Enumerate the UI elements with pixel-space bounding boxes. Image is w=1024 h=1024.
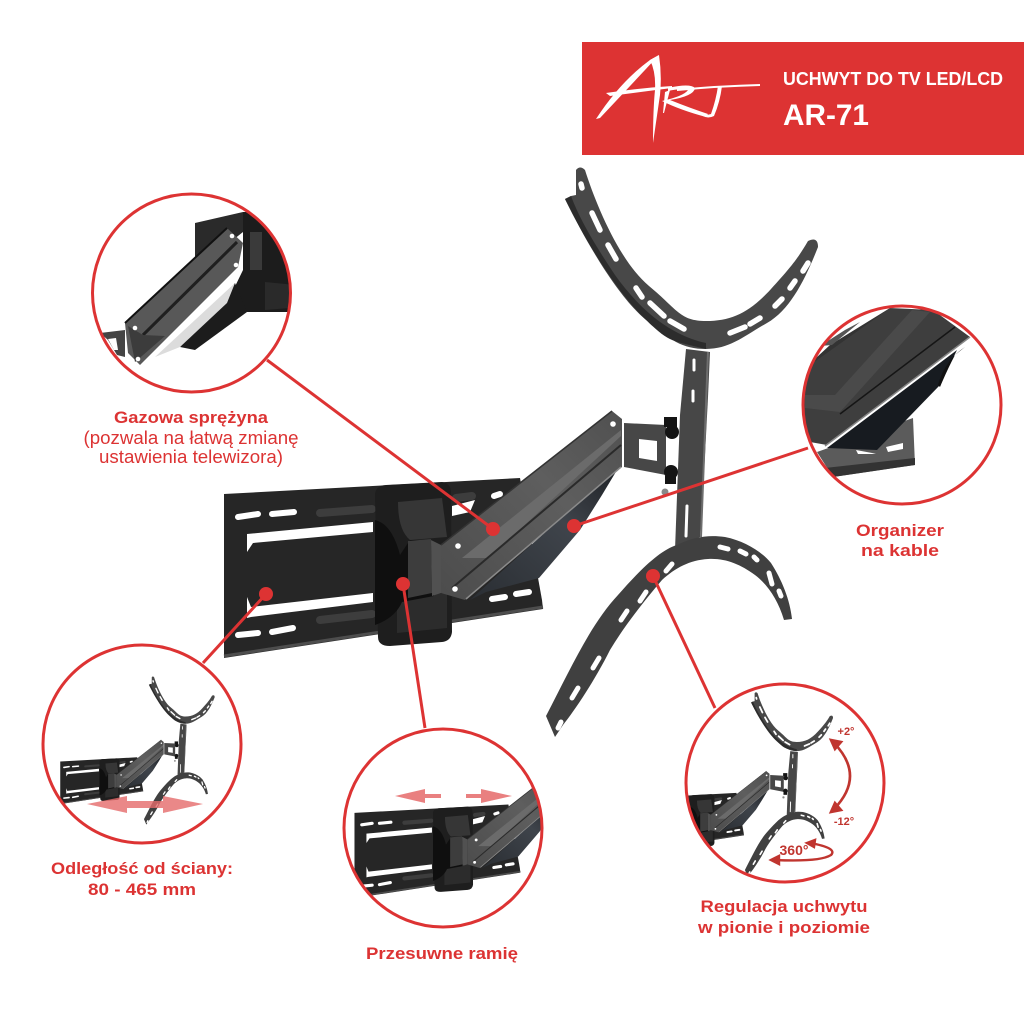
label: gas spring: [84, 408, 298, 467]
panel: cable organizer detail circle: [802, 306, 1001, 504]
label: wall distance: 80 - 465 mm: [88, 880, 196, 899]
leader line: adjustment: [646, 569, 715, 708]
leader line: sliding arm: [396, 577, 425, 728]
label: cable organizer: na kable: [861, 541, 939, 560]
leader line: gas spring: [267, 360, 500, 536]
label: gas spring: (pozwala na łatwą zmianę: [84, 428, 298, 448]
arrow: swivel: [771, 840, 832, 864]
arrow: tilt range: [831, 740, 850, 812]
product photo: full wall mount: [224, 168, 818, 737]
leader line: cable organizer: [567, 448, 808, 533]
tilt up value: +2°: [838, 726, 854, 738]
label: wall distance: [51, 859, 233, 899]
label: adjustment: w pionie i poziomie: [697, 918, 870, 937]
swivel value: 360°: [780, 842, 808, 858]
label: cable organizer: [856, 521, 944, 560]
label: adjustment: Regulacja uchwytu: [700, 897, 868, 916]
model number: AR-71: [783, 99, 869, 132]
panel: sliding arm detail circle: [342, 728, 544, 928]
arrows: slide left and right: [395, 789, 512, 803]
ART logo: [596, 55, 760, 143]
panel: wall distance detail circle: [43, 645, 241, 843]
label: gas spring: Gazowa sprężyna: [114, 408, 269, 427]
label: wall distance: Odległość od ściany:: [51, 859, 233, 878]
label: sliding arm: Przesuwne ramię: [366, 944, 518, 963]
leader line: wall distance: [203, 587, 273, 663]
label: gas spring: ustawienia telewizora): [99, 447, 283, 467]
header banner: [582, 42, 1024, 155]
arrow: distance range: [87, 796, 203, 813]
label: adjustment: [697, 897, 870, 937]
tilt down value: -12°: [834, 816, 854, 828]
header title: UCHWYT DO TV LED/LCD: [783, 69, 1003, 89]
panel: tilt and swivel detail circle: [684, 682, 886, 884]
panel: gas spring detail circle: [92, 194, 300, 392]
label: cable organizer: Organizer: [856, 521, 944, 540]
